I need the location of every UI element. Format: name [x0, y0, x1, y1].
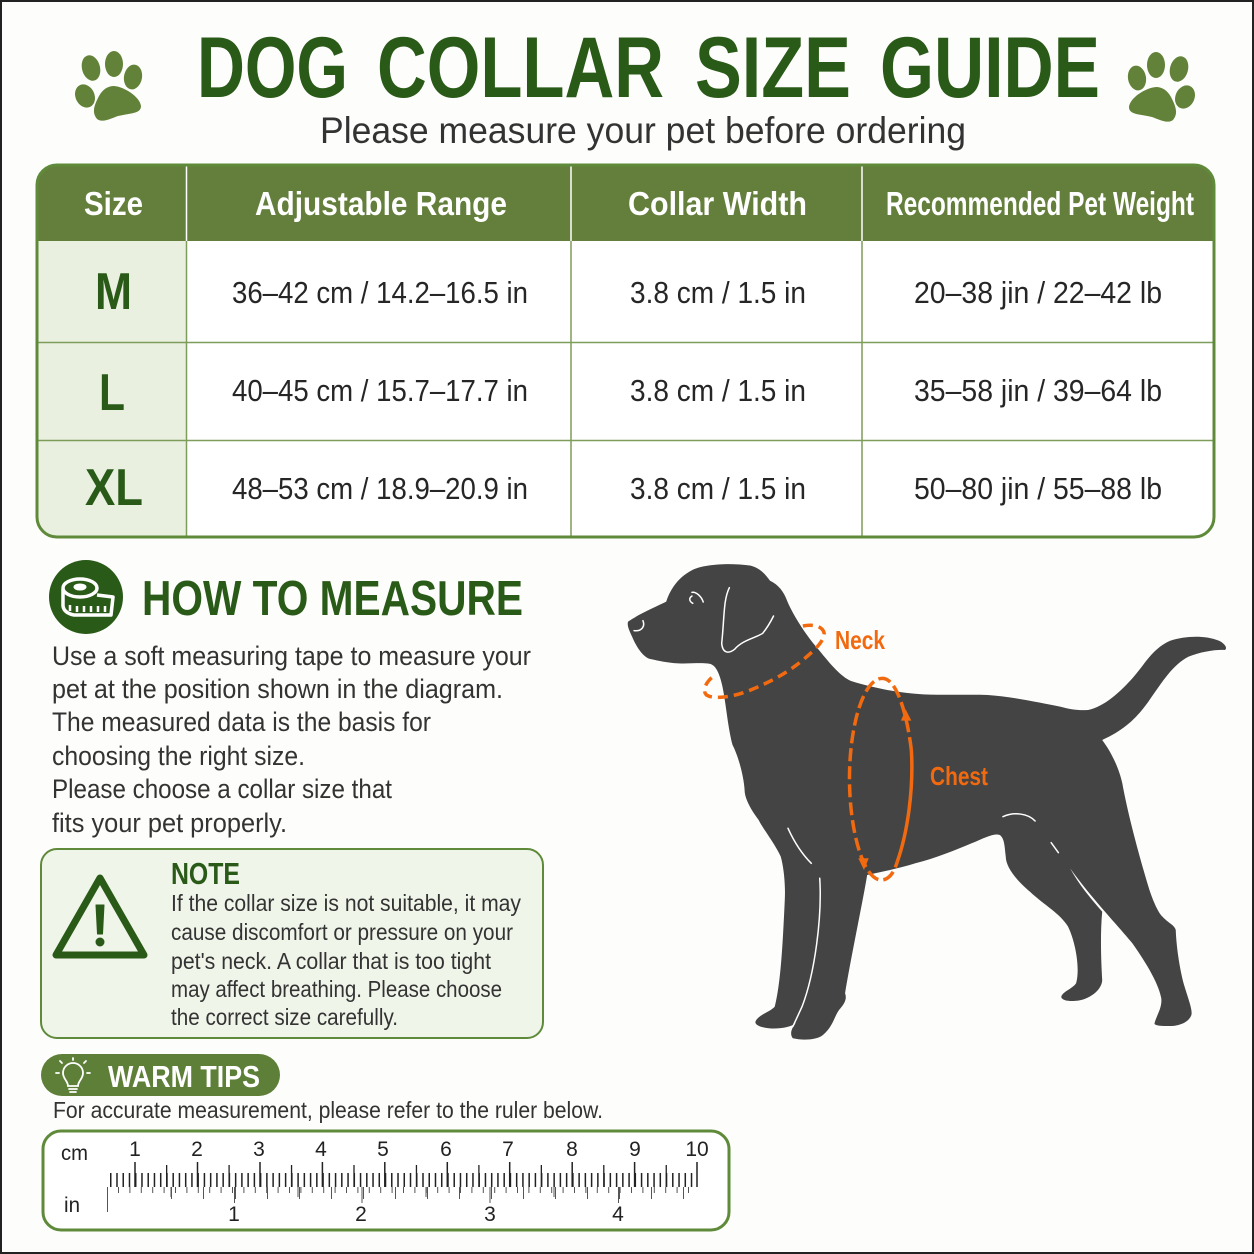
how to measure text: pet at the position shown in the diagram. [52, 674, 503, 704]
size table [37, 165, 1214, 537]
ruler: 8 [566, 1138, 578, 1161]
row XL: XL [85, 459, 143, 517]
table header row: Size [84, 185, 143, 222]
how to measure text: Please choose a collar size that [52, 774, 392, 804]
how to measure text [52, 641, 531, 838]
row M: 36–42 cm / 14.2–16.5 in [232, 275, 528, 310]
ruler: 6 [440, 1138, 452, 1161]
title: DOG [197, 20, 348, 116]
row L: 40–45 cm / 15.7–17.7 in [232, 373, 528, 408]
table header row [84, 185, 1194, 222]
how to measure text: choosing the right size. [52, 741, 305, 771]
row M: 20–38 jin / 22–42 lb [914, 275, 1162, 310]
note text: pet's neck. A collar that is too tight [171, 948, 492, 974]
panel: note [41, 849, 543, 1038]
ruler: 9 [629, 1138, 641, 1161]
ruler: 5 [377, 1138, 389, 1161]
ruler: 10 [685, 1138, 709, 1161]
ruler: 4 [612, 1203, 624, 1226]
subtitle: Please measure your pet before ordering [320, 110, 966, 151]
note text: If the collar size is not suitable, it may [171, 890, 521, 916]
title [197, 20, 1100, 116]
ruler: 3 [253, 1138, 265, 1161]
ruler [43, 1131, 729, 1230]
ruler: 7 [502, 1138, 514, 1161]
heading: how to measure: HOW TO MEASURE [142, 572, 523, 626]
neck measurement loop [704, 625, 824, 697]
table header row: Collar Width [628, 185, 807, 222]
row XL [85, 459, 1162, 517]
title: COLLAR [377, 20, 664, 116]
row XL: 3.8 cm / 1.5 in [630, 471, 806, 506]
ruler: 4 [315, 1138, 327, 1161]
ruler: 1 [228, 1203, 240, 1226]
table header row: Adjustable Range [255, 185, 507, 222]
ruler: 3 [484, 1203, 496, 1226]
chest label: Chest [930, 761, 988, 791]
ruler: in [64, 1194, 80, 1217]
icon: measuring tape [49, 560, 123, 634]
row XL: 50–80 jin / 55–88 lb [914, 471, 1162, 506]
cm scale [110, 1162, 697, 1187]
ruler caption: For accurate measurement, please refer to the ruler below. [53, 1097, 603, 1123]
ruler: 2 [355, 1203, 367, 1226]
icon: left paw [71, 51, 144, 121]
note text: the correct size carefully. [171, 1004, 398, 1030]
row M: 3.8 cm / 1.5 in [630, 275, 806, 310]
how to measure text: Use a soft measuring tape to measure your [52, 641, 531, 671]
note text [171, 890, 521, 1030]
row XL: 48–53 cm / 18.9–20.9 in [232, 471, 528, 506]
row L: 3.8 cm / 1.5 in [630, 373, 806, 408]
dog diagram [628, 564, 1226, 1040]
note text: may affect breathing. Please choose [171, 976, 502, 1002]
title: SIZE [695, 20, 851, 116]
ruler: 1 [129, 1138, 141, 1161]
icon: light bulb [56, 1058, 90, 1092]
how to measure text: fits your pet properly. [52, 808, 287, 838]
dog silhouette [628, 564, 1226, 1040]
dog details [634, 588, 1058, 1027]
chest measurement loop [849, 678, 912, 880]
note text: cause discomfort or pressure on your [171, 919, 513, 945]
row M [95, 263, 1162, 321]
warm tips badge [41, 1054, 280, 1096]
inch scale [108, 1187, 698, 1212]
ruler: cm [61, 1142, 88, 1165]
note heading: NOTE [171, 856, 240, 891]
ruler: 2 [191, 1138, 203, 1161]
row L: L [99, 364, 125, 422]
row L: 35–58 jin / 39–64 lb [914, 373, 1162, 408]
warm tips label: WARM TIPS [108, 1059, 260, 1094]
row L [99, 364, 1162, 422]
icon: warning triangle [56, 878, 144, 955]
icon: right paw [1126, 52, 1199, 122]
row M: M [95, 263, 132, 321]
how to measure text: The measured data is the basis for [52, 707, 431, 737]
title: GUIDE [880, 20, 1100, 116]
neck label: Neck [835, 625, 885, 655]
